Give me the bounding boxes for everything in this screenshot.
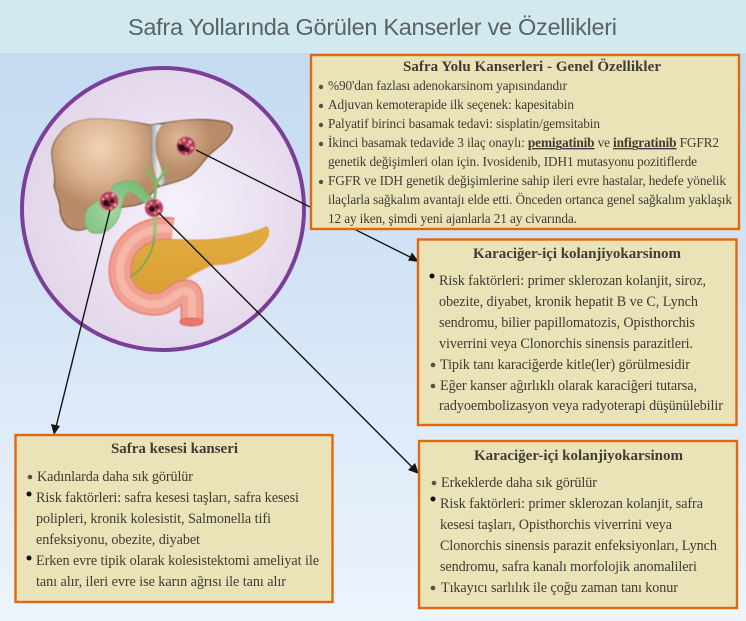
- bullet list: upper box: sendromu, bilier papillomatozis, Opisthorchis: [439, 315, 695, 331]
- icon: pancreas: [130, 227, 269, 293]
- organ drawings: [52, 119, 269, 326]
- anatomy illustration: [22, 68, 304, 350]
- bullet list: lower box: Clonorchis sinensis parazit enfeksiyonları, Lynch: [440, 538, 717, 554]
- panel: general features: [311, 55, 739, 229]
- bullet list: general features: 12 ay iken, şimdi yeni ajanlarla 21 ay civarında.: [328, 211, 577, 226]
- title band: [0, 0, 746, 53]
- bullet list: lower box: Tıkayıcı sarlılık ile çoğu zaman tanı konur: [441, 580, 678, 596]
- bullet list: gallbladder cancer: Risk faktörleri: safra kesesi taşları, safra kesesi: [36, 490, 299, 506]
- bullet list: lower box: sendromu, safra kanalı morfolojik anomalileri: [440, 559, 697, 575]
- bullet list: upper box: viverrini veya Clonorchis sinensis parazitleri.: [439, 336, 693, 352]
- icon: falciform ligament: [150, 124, 167, 186]
- bullet list: lower box: [430, 475, 717, 596]
- bullet list: general features: [319, 78, 732, 226]
- bullet list: gallbladder cancer: Erken evre tipik olarak kolesistektomi ameliyat ile: [36, 553, 319, 569]
- panel: intrahepatic cholangiocarcinoma upper: [418, 240, 736, 425]
- panel: intrahepatic cholangiocarcinoma lower: [419, 441, 737, 608]
- heading: upper box: Karaciğer-içi kolanjiyokarsinom: [473, 246, 682, 262]
- bullet list: lower box: Risk faktörleri: primer sklerozan kolanjit, safra: [440, 496, 704, 512]
- icon: gallbladder and ducts: [85, 168, 168, 277]
- bullet list: general features: %90'dan fazlası adenokarsinom yapısındandır: [328, 78, 568, 93]
- icon: tumor bile duct: [145, 199, 163, 217]
- bullet list: gallbladder cancer: [26, 469, 319, 590]
- bullet list: general features: genetik değişimleri olan için. Ivosidenib, IDH1 mutasyonu pozitiflerde: [328, 154, 697, 169]
- bullet list: gallbladder cancer: Kadınlarda daha sık görülür: [37, 469, 193, 485]
- icon: tumor right lobe: [176, 136, 196, 156]
- bullet list: gallbladder cancer: tanı alır, ileri evre ise karın ağrısı ile tanı alır: [36, 574, 286, 590]
- arrow: gallbladder tumor to gallbladder box: [51, 210, 110, 435]
- bullet list: general features: ilaçlarla sağkalım avantajı elde etti. Önceden ortanca genel sağkalım yaklaşık: [328, 192, 732, 207]
- bullet list: general features: İkinci basamak tedavide 3 ilaç onaylı: pemigatinib ve infigratinib FGFR2: [328, 135, 719, 150]
- title: Safra Yollarında Görülen Kanserler ve Özellikleri: [128, 14, 617, 40]
- bullet list: general features: FGFR ve IDH genetik değişimlerine sahip ileri evre hastalar, hedefe yönelik: [328, 173, 726, 188]
- panel: gallbladder cancer: [16, 435, 332, 602]
- heading: gallbladder cancer: Safra kesesi kanseri: [111, 441, 238, 457]
- bullet list: upper box: radyoembolizasyon veya radyoterapi düşünülebilir: [439, 398, 723, 414]
- arrow: duct tumor to lower box: [159, 213, 419, 474]
- icon: liver: [52, 119, 232, 230]
- arrow: liver tumor to intrahepatic box: [196, 150, 419, 262]
- heading: lower box: Karaciğer-içi kolanjiyokarsinom: [474, 448, 684, 464]
- bullet list: upper box: obezite, diyabet, kronik hepatit B ve C, Lynch: [439, 294, 698, 310]
- icon: duodenum: [120, 228, 203, 326]
- bullet list: general features: Palyatif birinci basamak tedavi: sisplatin/gemsitabin: [328, 116, 600, 131]
- bullet list: upper box: Risk faktörleri: primer sklerozan kolanjit, siroz,: [439, 273, 706, 289]
- bullet list: gallbladder cancer: enfeksiyonu, obezite, diyabet: [36, 532, 200, 548]
- bullet list: gallbladder cancer: polipleri, kronik kolesistit, Salmonella tifi: [36, 511, 271, 527]
- circle backdrop: [22, 68, 304, 350]
- bullet list: general features: Adjuvan kemoterapide ilk seçenek: kapesitabin: [328, 97, 574, 112]
- icon: tumor gallbladder: [100, 192, 118, 210]
- bullet list: upper box: [430, 273, 723, 414]
- bullet list: upper box: Tipik tanı karaciğerde kitle(ler) görülmesidir: [440, 357, 690, 373]
- bullet list: upper box: Eğer kanser ağırlıklı olarak karaciğeri tutarsa,: [440, 378, 697, 394]
- heading: general features: Safra Yolu Kanserleri - Genel Özellikler: [403, 58, 661, 75]
- bullet list: lower box: Erkeklerde daha sık görülür: [441, 475, 597, 491]
- bullet list: lower box: kesesi taşları, Opisthorchis viverrini veya: [440, 517, 673, 533]
